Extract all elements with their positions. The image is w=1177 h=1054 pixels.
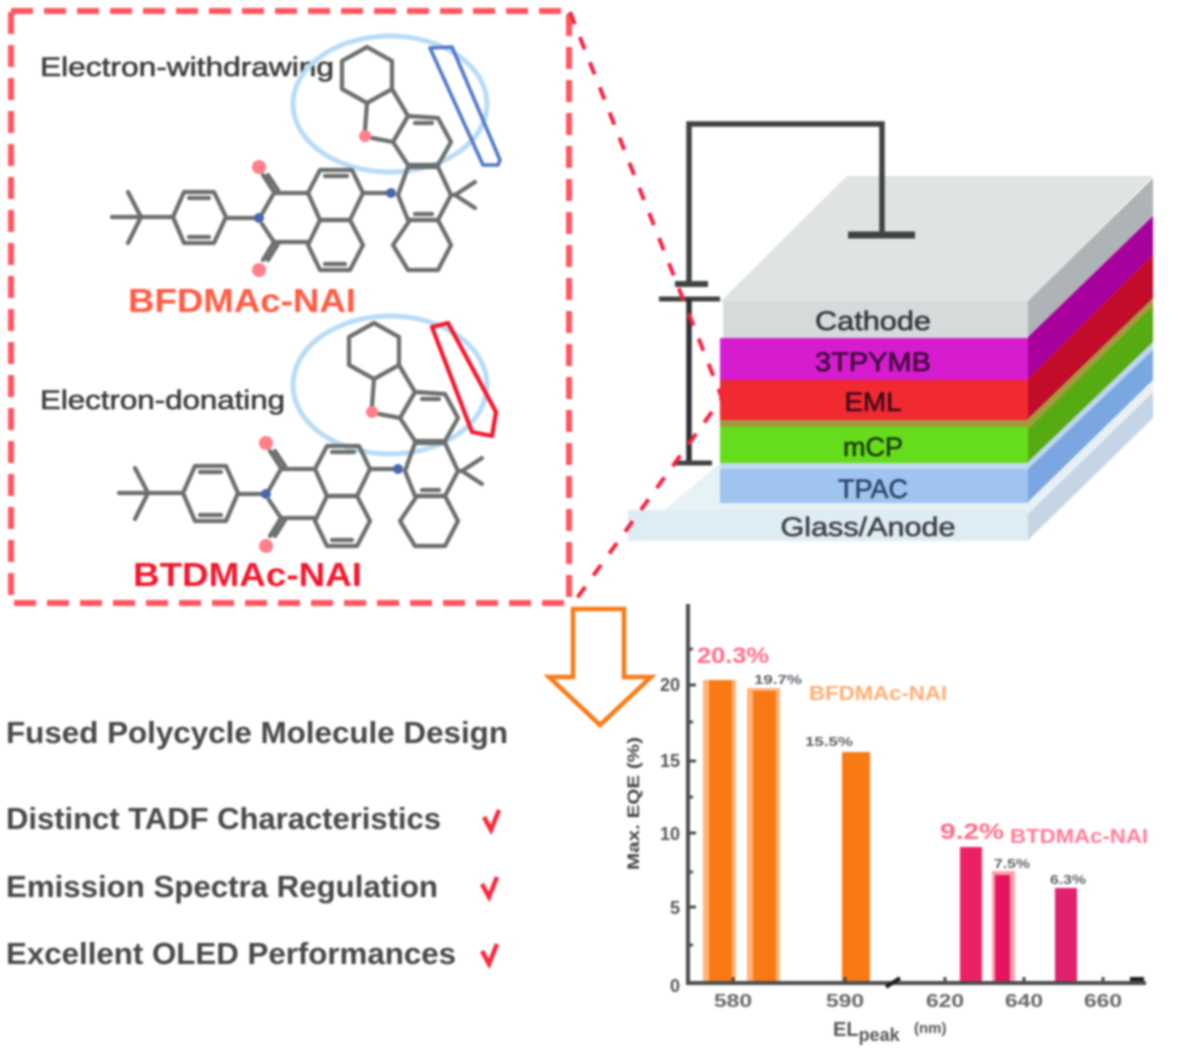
item: Distinct TADF Characteristics: Distinct TADF Characteristics (6, 801, 441, 836)
bar chart: Max EQE vs EL peak (624, 604, 1148, 1045)
label: Electron-withdrawing: Electron-withdrawing (40, 52, 334, 82)
highlight circle: bottom (293, 316, 487, 454)
icon: check marks (482, 810, 499, 964)
item: Excellent OLED Performances: Excellent OLED Performances (6, 936, 456, 971)
glass substrate top surface (628, 463, 1030, 541)
y-axis title: Max. EQE (%) (624, 737, 643, 870)
layer: TPAC (720, 463, 1028, 504)
layer: Glass/Anode (628, 510, 1028, 542)
x-axis title: EL (833, 1019, 859, 1041)
layer: Cathode: Cathode (815, 306, 931, 336)
blue bar (430, 47, 500, 165)
heteroatoms (259, 406, 403, 553)
y-axis tick labels (660, 675, 680, 996)
layer: Cathode (723, 301, 1028, 338)
x-axis tick labels (714, 991, 1122, 1011)
red bar (432, 323, 496, 436)
molecule: BFDMAc-NAI (112, 47, 475, 277)
y-axis tick labels: 10 (660, 824, 680, 844)
value labels: 7.5% (994, 856, 1031, 871)
layer: 3TPYMB: 3TPYMB (815, 347, 931, 377)
item: Emission Spectra Regulation: Emission Spectra Regulation (6, 869, 438, 904)
x-axis tick labels: 640 (1005, 991, 1043, 1011)
bars: BTDMAc-NAI (960, 847, 1077, 982)
layer: 3TPYMB (720, 338, 1028, 380)
panel: OLED device stack (628, 124, 1153, 542)
compound name: BTDMAc-NAI: BTDMAc-NAI (133, 556, 362, 593)
x-axis tick labels: 590 (826, 991, 864, 1011)
y-axis tick labels: 0 (670, 976, 680, 996)
stack side faces (1027, 178, 1153, 541)
legend: BTDMAc-NAI: BTDMAc-NAI (1010, 826, 1148, 848)
compound name: BFDMAc-NAI: BFDMAc-NAI (128, 282, 356, 319)
molecule: BTDMAc-NAI (119, 323, 482, 553)
value labels (697, 643, 1087, 887)
x-axis title: (nm) (914, 1020, 946, 1037)
text block: design features (6, 715, 508, 971)
axes (688, 604, 1146, 987)
dashed zoom lines (570, 12, 722, 605)
legend: BFDMAc-NAI: BFDMAc-NAI (809, 683, 947, 705)
value labels: 9.2% (940, 819, 1004, 844)
layer: Glass/Anode: Glass/Anode (780, 512, 956, 542)
x-axis tick labels: 660 (1084, 991, 1122, 1011)
value labels: 15.5% (805, 734, 854, 749)
y-axis tick labels: 20 (660, 675, 680, 695)
x-axis tick labels: 580 (714, 991, 752, 1011)
value labels: 6.3% (1050, 872, 1087, 887)
layer: mCP (720, 427, 1028, 463)
layer: TPAC: TPAC (838, 474, 908, 504)
bars: BFDMAc-NAI (703, 680, 870, 982)
heading: Fused Polycycle Molecule Design: Fused Polycycle Molecule Design (6, 715, 508, 750)
layer: mCP: mCP (843, 432, 903, 462)
arrow: orange down arrow (549, 609, 651, 725)
y-axis tick labels: 15 (660, 751, 680, 771)
layer: EML (720, 380, 1028, 420)
panel: molecular design dashed frame (11, 11, 722, 605)
value labels: 20.3% (697, 643, 769, 668)
highlight circle: top (293, 36, 487, 172)
y-axis tick labels: 5 (670, 898, 680, 918)
cathode top surface (720, 176, 1153, 302)
heteroatoms (252, 130, 396, 277)
x-axis title: peak (859, 1025, 901, 1045)
value labels: 19.7% (754, 672, 803, 687)
circuit wire and electrode contacts (659, 124, 915, 463)
label: Electron-donating: Electron-donating (40, 385, 285, 415)
x-axis tick labels: 620 (926, 991, 964, 1011)
layer: EML: EML (844, 387, 902, 417)
